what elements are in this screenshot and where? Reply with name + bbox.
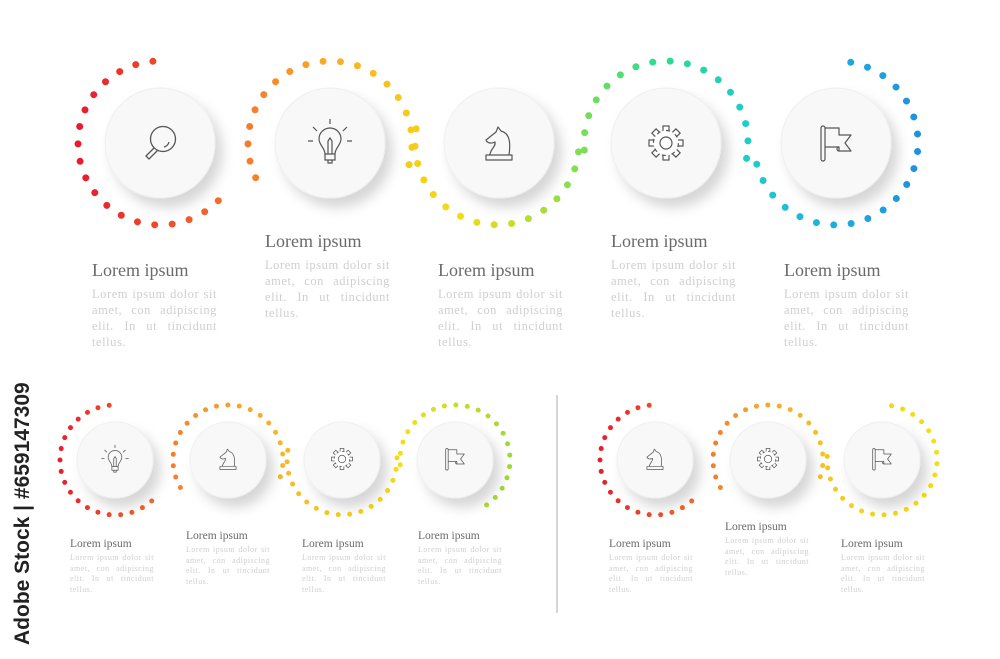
circles: [77, 88, 920, 498]
text: bottom left 3: amet, con adipiscing: [302, 564, 386, 572]
text: bottom left 3: elit. In ut tincidunt: [302, 574, 386, 583]
text: top 4: amet, con adipiscing: [611, 274, 736, 288]
text: bottom left 1: Lorem ipsum: [70, 538, 132, 550]
text: top 1: Lorem ipsum dolor sit: [92, 287, 217, 301]
text: top 5: tellus.: [784, 335, 818, 349]
icon: small gear: [331, 448, 353, 470]
text: top 1: tellus.: [92, 335, 126, 349]
text: bottom right 3: Lorem ipsum dolor sit: [841, 553, 925, 562]
icon: small flag: [446, 448, 464, 470]
text: top 2: Lorem ipsum: [265, 231, 362, 251]
text: top 1: elit. In ut tincidunt: [92, 319, 217, 333]
text: top 2: elit. In ut tincidunt: [265, 290, 390, 304]
text: top 3: elit. In ut tincidunt: [438, 319, 563, 333]
text: bottom left 4: amet, con adipiscing: [418, 556, 502, 564]
text: top 5: Lorem ipsum: [784, 260, 880, 280]
icon: small bulb: [101, 445, 129, 472]
text: bottom right 3: tellus.: [841, 584, 864, 594]
text: top 1: amet, con adipiscing: [92, 303, 217, 317]
text: top 5: amet, con adipiscing: [784, 303, 909, 317]
text: bottom right 2: tellus.: [725, 568, 748, 576]
icon: small gear right: [757, 448, 779, 470]
icon: gear: [649, 126, 683, 160]
dotted wave: top row: [78, 61, 918, 225]
text: bottom left 1: Lorem ipsum dolor sit: [70, 553, 154, 562]
text: bottom left 3: Lorem ipsum: [302, 538, 364, 550]
text: bottom right 3: elit. In ut tincidunt: [841, 574, 925, 583]
text: bottom left 1: elit. In ut tincidunt: [70, 574, 154, 583]
text: top 4: Lorem ipsum dolor sit: [611, 258, 736, 272]
text: bottom left 3: [302, 538, 386, 594]
icon: small knight right: [647, 449, 663, 470]
text: top 2: tellus.: [265, 306, 299, 320]
text: bottom right 2: [725, 521, 809, 576]
text: top 4: elit. In ut tincidunt: [611, 290, 736, 304]
text: bottom left 2: elit. In ut tincidunt: [186, 566, 270, 575]
text: bottom right 2: amet, con adipiscing: [725, 546, 809, 556]
text: bottom right 1: amet, con adipiscing: [609, 564, 693, 572]
text: bottom right 3: Lorem ipsum: [841, 538, 903, 550]
text: bottom left 2: Lorem ipsum: [186, 530, 248, 542]
text: bottom left 3: Lorem ipsum dolor sit: [302, 553, 386, 562]
text: bottom left 1: tellus.: [70, 584, 93, 594]
icon: small flag right: [873, 448, 891, 470]
text: top 3: tellus.: [438, 335, 472, 349]
text: top 5: Lorem ipsum dolor sit: [784, 287, 909, 301]
text: top 3: Lorem ipsum: [438, 260, 534, 280]
dotted wave: bottom right: [600, 405, 937, 515]
text: bottom right 1: Lorem ipsum dolor sit: [609, 553, 693, 562]
text: bottom right 2: Lorem ipsum dolor sit: [725, 536, 809, 545]
text: bottom left 3: tellus.: [302, 584, 325, 594]
text: bottom right 1: tellus.: [609, 584, 632, 594]
text: bottom left 1: [70, 538, 154, 594]
text: bottom left 2: tellus.: [186, 576, 209, 586]
text: bottom left 4: Lorem ipsum dolor sit: [418, 545, 502, 554]
text: bottom right 1: [609, 538, 693, 594]
icon: small knight: [220, 449, 236, 470]
icon: flag: [821, 126, 851, 161]
text: top 5: elit. In ut tincidunt: [784, 319, 909, 333]
icon: knight: [486, 127, 512, 160]
text: top 2: Lorem ipsum dolor sit: [265, 258, 390, 272]
dotted wave: bottom left: [60, 405, 510, 515]
icon: search: [146, 126, 176, 159]
text: bottom right 3: [841, 538, 925, 594]
text: top 4: Lorem ipsum: [611, 231, 708, 251]
text: top 5: [784, 260, 909, 349]
text: bottom right 2: elit. In ut tincidunt: [725, 557, 809, 566]
text: bottom left 2: Lorem ipsum dolor sit: [186, 545, 270, 554]
text: top 2: [265, 231, 390, 320]
text: top 4: [611, 231, 736, 320]
text: bottom left 2: amet, con adipiscing: [186, 556, 270, 564]
text: top 1: Lorem ipsum: [92, 260, 188, 280]
text: bottom left 1: amet, con adipiscing: [70, 564, 154, 572]
text: bottom right 3: amet, con adipiscing: [841, 564, 925, 572]
watermark id: Adobe Stock | #659147309: [11, 382, 34, 645]
text: bottom right 1: Lorem ipsum: [609, 538, 671, 550]
text: bottom left 4: elit. In ut tincidunt: [418, 566, 502, 575]
text: top 4: tellus.: [611, 306, 645, 320]
text: bottom right 2: Lorem ipsum: [725, 521, 787, 533]
text: top 3: amet, con adipiscing: [438, 303, 563, 317]
text: bottom left 4: Lorem ipsum: [418, 530, 480, 542]
text: top 3: Lorem ipsum dolor sit: [438, 287, 563, 301]
text: top 2: amet, con adipiscing: [265, 274, 390, 288]
text: bottom right 1: elit. In ut tincidunt: [609, 574, 693, 583]
text: bottom left 4: tellus.: [418, 576, 441, 586]
text: bottom left 4: [418, 530, 502, 586]
text: bottom left 2: [186, 530, 270, 586]
text: top 3: [438, 260, 563, 349]
text: top 1: [92, 260, 217, 349]
icon: bulb: [308, 119, 352, 163]
